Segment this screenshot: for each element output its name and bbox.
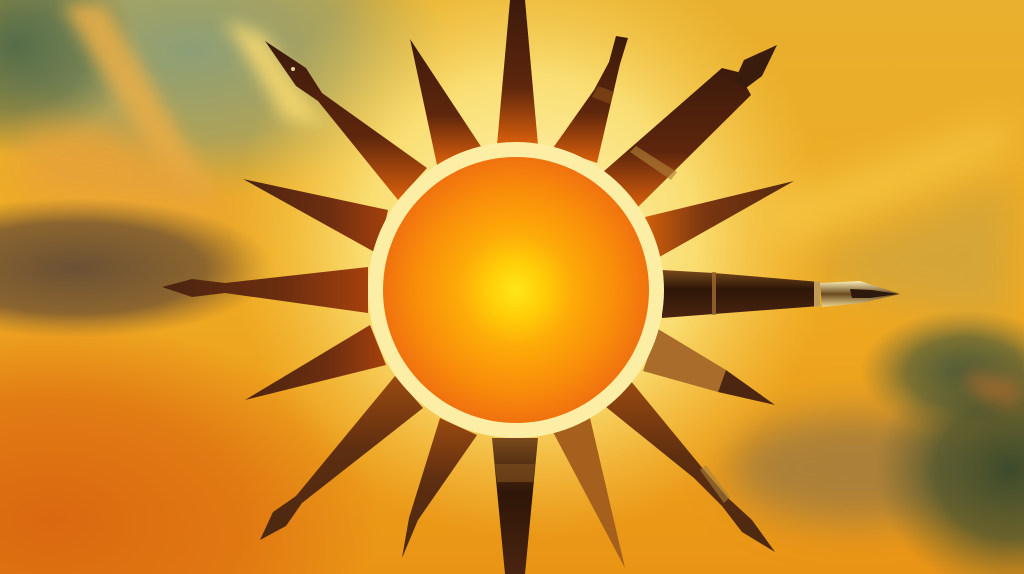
ray: brush lower left [260,376,423,540]
ray: brush lower right [643,329,775,405]
sun: orange disc [383,157,649,423]
ray: brush left [162,267,368,313]
sun: pale outer ring [368,142,664,438]
ray: spike upper left [410,39,482,165]
ray: marker pen upper right [553,36,628,163]
ray: spike left lower [245,325,386,400]
ray: spike left upper [243,179,388,254]
ray: spike top [497,0,538,145]
ray: fountain pen right [662,270,900,318]
ray: spike lower left [402,418,477,558]
ray: spike right upper [645,181,794,260]
ray: brush bottom [492,438,538,574]
ray: fountain pen upper left [265,41,427,200]
ray: spike lower right [553,418,625,568]
ray: fountain pen lower right [606,380,775,552]
ray: large brush pen upper right [603,45,777,208]
